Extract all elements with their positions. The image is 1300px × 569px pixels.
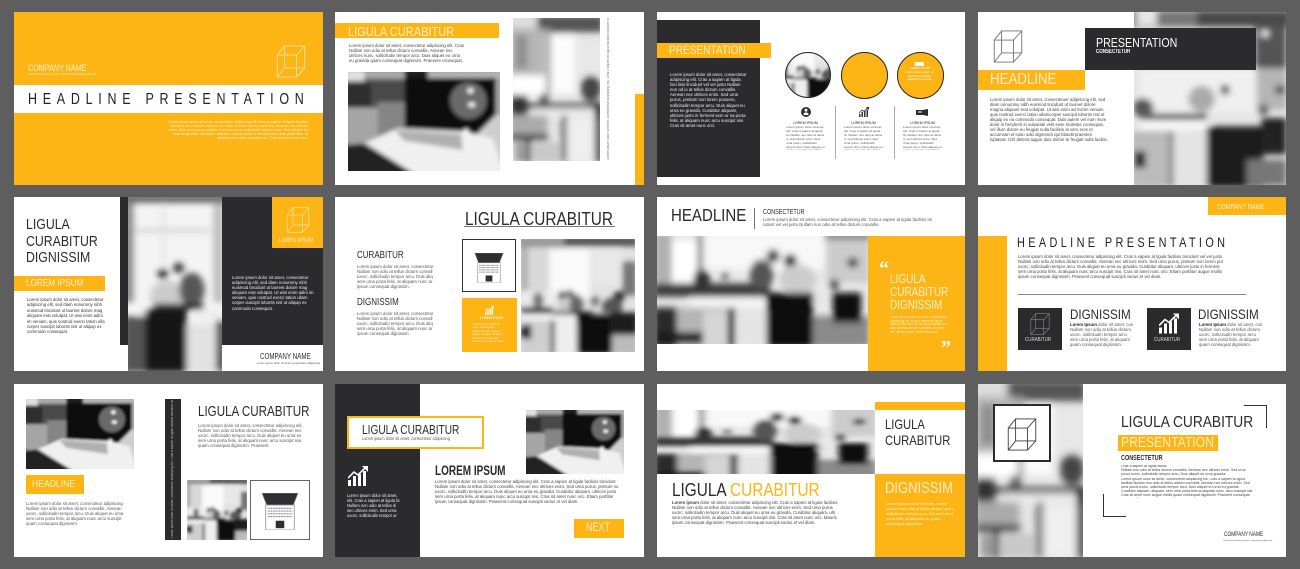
heading: DIGNISSIM (356, 297, 398, 308)
dark vertical bar (164, 398, 181, 540)
slide 5 (14, 197, 323, 371)
heading: CURABITUR (356, 250, 403, 261)
photo (657, 236, 868, 344)
slide 1: cover (14, 12, 323, 185)
company tagline: Lorem ipsum dolor sit amet, consectetur adipiscing (1223, 540, 1272, 542)
title bar (335, 23, 499, 38)
body text: Lorem ipsum dolor sit amet, consectetur adipiscing elit. Cras a sapien at ligula facilisis tincidunt Nullam non odio at tellus dictum convallis. Aenean nec ultrices enim. Sed urna purus, pretium no uxorc, sollicitudin tempor arcu. Duis aliquet eu urna eu gravida. Curabitur aliquam, ultrices justo sem urna porta felis, at aliquam nunc arcu suscipit nisi. Cras sit amet nunc orci. Etiam porttitor ipsum consequat dignissim. Praesent consequat suscipit varius et vel diam. (435, 479, 618, 504)
side title: CURABITUR (885, 432, 950, 448)
icon: chart (1159, 314, 1179, 334)
headline band (14, 85, 323, 113)
panel text: Lorem ipsum dolor sit amet, consectetur adipiscing elit. Cras a sapien at ligula faci lisis tincidunt vel vel justo Nullam non od io at tellus dictum convallis. Aenean nec ultrices enim. Sed urna purus, pretium non lorem posuere, sollicitudin tempor arcu. Duis aliquet eu urna eu gravida. Curabitur aliquam, ultrices justo in ferment sem ur na porta felis, at aliquam nunc arcu suscipit nisi. Cras sit amet nunc orci. (670, 72, 746, 128)
panel title: DIGNISSIM (885, 480, 953, 496)
company tagline: Lorem ipsum dolor sit amet, consectetur adipiscing elit cras (28, 73, 96, 76)
divider (752, 208, 755, 229)
yellow side bar (978, 236, 1007, 371)
panel text: Lorem ipsum dolor sit amet, conse Nullam non odio at tellus dictum uxorc, sollicitudin tempor arcu. Dui sem urna porta felis, at aliquam nu quam consequat dignissim. (886, 501, 955, 526)
subtitle: CONSECTETUR (1121, 455, 1163, 462)
heading left: DIGNISSIM (1070, 306, 1131, 322)
panel subtitle: CONSECTETUR (1096, 49, 1130, 55)
yellow square (272, 197, 323, 248)
icon: laptop (474, 253, 504, 283)
slide 3 (657, 12, 965, 185)
dark strip (120, 197, 128, 345)
body text: Lorem ipsum dolor sit amet, consectetur adipiscing elit, Nullam non odio at tellus dictum convallis. Aenean nec uxorc, sollicitudin tempor arcu. Duis aliquet eu urna eu sem urna porta felis, at aliquam nunc arcu suscipit nisi. quam consequat dignissim. Praesent. (198, 423, 303, 448)
divider (892, 106, 895, 159)
dark panel (657, 20, 760, 177)
icon: projector (916, 109, 928, 116)
title: PRESENTATION (669, 44, 746, 56)
panel text: Lorem ipsum dolor sit amet, (347, 493, 398, 498)
title: CURABITUR (26, 232, 98, 250)
box label: CURABITUR (1025, 337, 1051, 343)
body text: Lorem ipsum dolor sit amet, consectetur adipiscing elit. Cras Nullam non odio at tellus dictum convallis. Aenean nec ultrices nunc, sollicitudin tempor arcu. Duis aliquet eu urna eu gravida quam consequat dignissim. Praesent consequat. (349, 43, 464, 63)
quote title: DIGNISSIM (890, 298, 942, 312)
icon: cube (1008, 418, 1036, 451)
company tagline: Lorem ipsum dolor sit amet, consectetur adipiscing (257, 360, 320, 364)
dark panel (222, 197, 323, 345)
dark side panel (335, 384, 420, 557)
column 1 text: LOREM IPSUM (793, 121, 818, 125)
panel text (347, 493, 400, 518)
title underline (464, 225, 615, 228)
title: LIGULA CURABITUR (465, 209, 613, 229)
circle yellow with text (896, 52, 944, 99)
intro text: Lorem ipsum dolor sit amet, consectetur adipiscing elit. Cras a sapien at ligula facilisis tin cidunt vel vel justo Nullam non odio at tellus dictum convallis. (763, 216, 932, 227)
heading: LOREM IPSUM (435, 462, 505, 478)
rule (1018, 293, 1246, 296)
panel text: sec ultrices enim. Sed urna (347, 508, 396, 513)
yellow panel (868, 236, 965, 371)
headline: HEADLINE (32, 478, 75, 490)
icon: cube (994, 30, 1022, 63)
slide 8 (978, 197, 1286, 371)
title: LIGULA CURABITUR (362, 423, 459, 437)
text left: Lorem Ipsum dolor sit amet, con Nullam non odio at tellus dictum uxorc, sollicitudin tempor arcu sem urna porta felis, at aliquam quam consequat dignissim. (1070, 322, 1133, 347)
headline: HEADLINE (990, 71, 1056, 88)
laptop box (250, 480, 310, 540)
text right: Lorem Ipsum dolor sit amet, con Nullam non odio at tellus dictum uxorc, sollicitudin tempor arcu sem urna porta felis, at aliquam quam consequat dignissim. (1199, 322, 1262, 347)
yellow panel (875, 474, 965, 557)
circle yellow (841, 52, 888, 99)
panel title: PRESENTATION (1096, 35, 1177, 50)
icon: cube (276, 45, 306, 78)
circle photo (785, 52, 831, 98)
slide 12 (978, 384, 1286, 557)
short text: Nullam non odio at tellus dictum convallis. Aenean nec ultrices enim. Sed urna purus uxorc, sollicitudin tempor arcu. Duis aliquet eu urna gravida. (1121, 468, 1245, 476)
dark panel (1085, 28, 1256, 70)
divider (834, 106, 836, 159)
icon: chart (485, 306, 494, 315)
company name: COMPANY NAME (1224, 531, 1263, 538)
title sub text: Lorem ipsum dolor sit amet, consectetur adipiscing (362, 436, 450, 441)
title (26, 216, 98, 266)
slide 10 (335, 384, 644, 557)
body text: Lorem ipsum dolor sit amet, consectetuer adipiscing elit, sed diam nonummy nibh euismod tincidunt ut laoreet dolore magna aliquam erat volutpat. Ut wisi enim ad minim veniam, quis nostrud exerci tation ullamcorper suscipit lobortis nisl ut aliquip ex ea commodo consequat. Duis autem vel eum iriure dolor in hendrerit in vulputate velit esse molestie consequat, vel illum dolore eu feugiat nulla facilisis at vero eros et accumsan et iusto odio dignissim qui blandit praesent luptatum zzril delenit augue duis dolore te feugait nulla facilisi. (990, 97, 1108, 142)
column 2 text: LOREM IPSUM (851, 121, 876, 125)
headline tag (26, 475, 84, 494)
headline: HEADLINE PRESENTATION (28, 90, 310, 108)
box label: LOREM IPSUM (480, 316, 503, 320)
panel text: Nullam non odio at tellus di (347, 503, 396, 508)
company name: COMPANY NAME (1217, 202, 1265, 210)
open quote: “ (879, 258, 889, 280)
text: Lorem ipsum dolor sit amet, consectetur Nullam non odio at tellus dictum convall uxorc, sollicitudin tempor arcu. Duis aliq sem urna porta felis, at aliquam nunc ar ipsum consequat dignissim. (357, 264, 433, 289)
yellow box (462, 298, 517, 352)
photo (1134, 12, 1286, 185)
circle icon (915, 62, 924, 66)
company tag (1208, 197, 1286, 215)
slide 7 (657, 197, 965, 371)
icon: chart (859, 107, 869, 117)
circle text: Lorem ipsum dolor sit amet consectetur adipiscing elit cras (905, 70, 934, 81)
slide 4 (978, 12, 1286, 185)
icon: cube (1030, 313, 1050, 335)
box label: CURABITUR (1154, 337, 1180, 343)
photo: camera (526, 410, 624, 474)
body text: Lorem ipsum dolor sit amet, consectetur adipiscing elit. Cras a sapien at ligula facilisis Nullam non odio at tellus dictum convallis. Aenean nec ultrices enim. Sed urna purus uxorc, sollicitudin tempor arcu. Duis aliquet eu urna eu gravida. Curabitur aliquam, ulti sem urna porta felis, at aliquam nunc arcu suscipit nisi. Cras sit amet nunc orci. Mauris ipsum consequat dignissim. Praesent consequat suscipit varius et vel diam. (672, 500, 838, 525)
next label: NEXT (586, 522, 610, 534)
quote title: LIGULA (890, 272, 926, 286)
text: Lorem ipsum dolor sit amet, consectetur Nullam non odio at tellus dictum convall uxorc, sollicitudin tempor arcu. Duis aliq sem urna porta felis, at aliquam nunc ar ipsum consequat dignissim. (357, 311, 433, 336)
side title (885, 416, 950, 448)
title: LIGULA CURABITUR (1121, 414, 1253, 431)
title box (346, 416, 484, 449)
panel text: elit. Cras a sapien at ligula fa (347, 498, 400, 503)
title: LIGULA CURABITUR (672, 478, 820, 500)
photo: cafe (187, 480, 247, 540)
photo (128, 197, 222, 371)
body text: Lorem ipsum dolor sit amet, consectetur adipiscing elit, sed diam nonummy nibh euismod tincidunt ut laoreet dolore mag aliquam erat volutpat. Ut wisi enim adini im veniam, quis nostrud exerci tation ulla corper suscipit lobortis nisl ut aliquip ex commodo consequat. (27, 297, 105, 334)
panel text: uxorc, sollicitudin tempor ar (347, 513, 397, 518)
subtitle: CONSECTETUR (763, 208, 805, 216)
square label: LOREM IPSUM (279, 237, 313, 244)
icon: cube (286, 207, 310, 233)
presentation bar (1118, 435, 1218, 451)
slide 11 (657, 384, 965, 557)
quote title: CURABITUR (890, 285, 948, 299)
photo (657, 410, 875, 474)
body text: Lorem ipsum dolor sit amet, consectetur adipiscing elit. Cras a sapien at ligula facilisis tincidunt vel vel justo Nullam non odio at tellus dictum convallis. Aenean nec ultrices enim. Sed urna purus, pretium non lorem pur uxorc, sollicitudin tempor arcu. Duis aliquet eu urna eu gravida. Curabitur aliquam, ultrices justo in ferment sem urna porta felis, at aliquam nunc arcu suscipit nisi. Cras sit amet nunc orci. Etiam porttitor augue mollis ipsum consequat dignissim. Praesent consequat suscipit varius et vel diam. (1018, 254, 1223, 279)
panel text: Lorem ipsum dolor sit amet, consectetur adipiscing elit, sed diam nonummy nibh euismod tincidunt ut laoreet dolore mag aliquam erat volutpat. Ut wisi enim adini im veniam, quis nostrud exerci tation ullam corper suscipit lobortis nisl ut aliquip ex commodo consequat. (232, 275, 313, 311)
title: LIGULA CURABITUR (348, 24, 454, 38)
top right corner (1244, 405, 1267, 428)
subtitle: LOREM IPSUM (26, 277, 83, 289)
yellow side bar (635, 94, 644, 185)
photo: cafe tall (513, 18, 600, 161)
heading right: DIGNISSIM (1198, 306, 1259, 322)
close quote: ” (941, 337, 951, 359)
photo: camera (348, 72, 500, 171)
side title: LIGULA (885, 416, 925, 432)
company name: COMPANY NAME (260, 352, 311, 361)
slide 6 (335, 197, 644, 371)
body text: Lorem ipsum dolor sit amet, consectetur adipiscing elit. Cras a sapien at ligula facilisis tincidunt vel vel justo. Nullam non odio at tellus dictum convallis. Aenean nec ultrices enim. Sed urna purus, pretium non lorem pur, sollicitudin tempor arcu. Duis aliquet eu urna eu gravida. Curabitur aliquam, ultrices justo in ferment sem urna porta felis, at aliquam nunc arcu suscipit nisi. Cras sit amet nunc orci. (168, 120, 308, 140)
slide 2 (335, 12, 644, 185)
title: LIGULA CURABITUR (198, 404, 310, 420)
subtitle bar (14, 276, 105, 291)
title bar (657, 43, 770, 58)
headline: HEADLINE PRESENTATION (1017, 234, 1228, 250)
headline: HEADLINE (671, 205, 746, 225)
headline bar (978, 70, 1085, 90)
photo (521, 239, 635, 352)
icon box (993, 404, 1051, 462)
company name: COMPANY NAME (28, 63, 87, 73)
title: LIGULA (26, 216, 70, 233)
icon: people (801, 107, 811, 117)
laptop box (462, 239, 516, 292)
next button (574, 519, 624, 538)
yellow top strip (875, 402, 965, 410)
icon: laptop (262, 493, 298, 530)
dark box left (1018, 308, 1062, 350)
photo (978, 384, 1083, 557)
photo: camera (26, 399, 134, 469)
title: DIGNISSIM (26, 249, 90, 266)
bottom left corner (1103, 494, 1126, 517)
slide 9 (14, 384, 323, 557)
dark box right (1147, 308, 1191, 350)
quote title (890, 272, 948, 312)
body text: Lorem ipsum dolor sit amet, consectetur adipiscing Nullam non odio at tellus dictum convallis. Aenean uxorc, sollicitudin tempor arcu. Duis aliquet eu urna sem urna porta felis, at aliquam nunc arcu suscipit quam consequat dignissim. (26, 501, 123, 526)
column 3 text: LOREM IPSUM (910, 121, 935, 125)
presentation: PRESENTATION (1121, 435, 1214, 451)
icon: chart (348, 466, 368, 486)
